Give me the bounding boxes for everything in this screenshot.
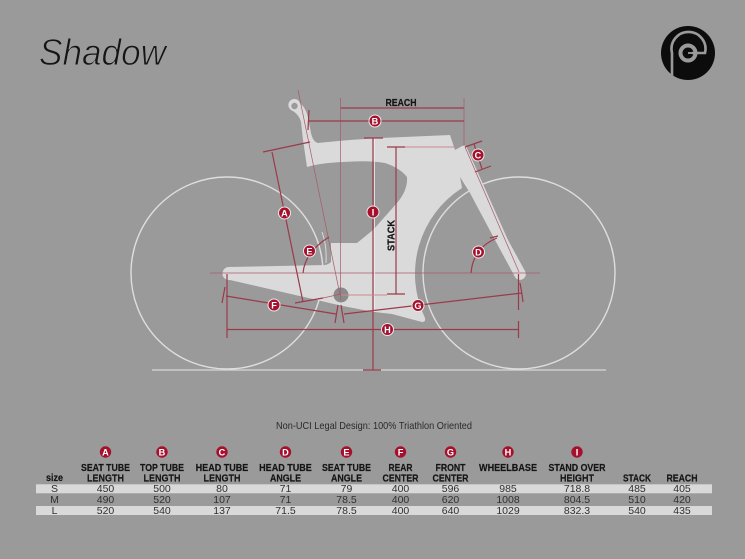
column B: top tube length: TOP TUBE	[140, 462, 184, 474]
column C: head tube length: LENGTH	[204, 472, 240, 484]
column B: top tube length: 540	[153, 505, 171, 517]
column: stack: 510	[628, 494, 646, 506]
column: size: M	[50, 494, 59, 506]
column H: wheelbase: 1029	[496, 505, 520, 517]
column C: head tube length: 137	[213, 505, 231, 517]
column G: front center	[432, 446, 469, 517]
column: stack: STACK	[623, 472, 651, 484]
dimension G: front center	[341, 283, 523, 323]
column E: seat tube angle	[322, 446, 371, 517]
column B: top tube length: 520	[153, 494, 171, 506]
column D: head tube angle: HEAD TUBE	[259, 462, 312, 474]
column C: head tube length: 107	[213, 494, 231, 506]
column E: seat tube angle: 79	[341, 483, 352, 495]
bottom bracket	[334, 288, 348, 302]
ground line	[152, 369, 606, 371]
seat clamp hole	[291, 103, 298, 109]
column: size: S	[51, 483, 58, 495]
column D: head tube angle: D	[282, 447, 289, 457]
column F: rear center: 400	[392, 483, 409, 495]
dimension F: rear center: F	[271, 300, 277, 310]
column B: top tube length: 500	[153, 483, 171, 495]
stack label: STACK	[386, 220, 398, 251]
row band L	[36, 506, 712, 515]
dimension D: head tube angle: D	[475, 247, 482, 257]
dimension B: top tube: B	[372, 116, 379, 126]
column: stack	[623, 472, 651, 517]
thin seat-stay highlight	[322, 232, 326, 263]
column F: rear center	[382, 446, 419, 517]
dimension I: stand over height	[363, 138, 383, 370]
column E: seat tube angle: 78.5	[336, 494, 357, 506]
column H: wheelbase: WHEELBASE	[479, 462, 537, 474]
bike geometry diagram	[131, 90, 615, 370]
dimension H: wheelbase	[227, 274, 518, 338]
column I: stand over height: HEIGHT	[560, 472, 594, 484]
dimension I: stand over height: I	[372, 207, 374, 217]
head tube axis line	[465, 147, 519, 272]
column I: stand over height: STAND OVER	[548, 462, 606, 474]
dimension A: seat tube length: A	[281, 208, 288, 218]
rear wheel	[131, 177, 323, 369]
dimension D: head tube angle	[471, 236, 498, 273]
column G: front center: 596	[442, 483, 459, 495]
column I: stand over height: 832.3	[564, 505, 590, 517]
subtitle note: Non-UCI Legal Design: 100% Triathlon Oriented	[276, 420, 472, 432]
column A: seat tube length	[81, 446, 130, 517]
column: stack: 540	[628, 505, 646, 517]
column I: stand over height: 718.8	[564, 483, 590, 495]
title: Shadow	[39, 32, 168, 73]
column D: head tube angle: ANGLE	[270, 472, 301, 484]
column C: head tube length: C	[219, 447, 226, 457]
dimension A: seat tube length	[263, 142, 341, 303]
column B: top tube length: LENGTH	[144, 472, 180, 484]
bike frame silhouette	[222, 99, 526, 322]
column G: front center: G	[447, 447, 454, 457]
column E: seat tube angle: SEAT TUBE	[322, 462, 371, 474]
column I: stand over height	[548, 446, 606, 517]
dimension C: head tube length	[465, 141, 491, 172]
column B: top tube length: B	[159, 447, 166, 457]
column H: wheelbase	[479, 446, 537, 517]
seat tube axis line	[298, 90, 340, 295]
column G: front center: FRONT	[436, 462, 466, 474]
column: stack: 485	[628, 483, 646, 495]
column F: rear center: 400	[392, 505, 409, 517]
column F: rear center: 400	[392, 494, 409, 506]
column B: top tube length	[140, 446, 184, 517]
dimension B: top tube	[308, 110, 464, 130]
dimension G: front center: G	[414, 301, 422, 311]
icon: brand logo	[661, 26, 715, 80]
column: reach: REACH	[666, 472, 698, 484]
column F: rear center: REAR	[388, 462, 413, 474]
column C: head tube length: HEAD TUBE	[196, 462, 248, 474]
column: reach: 435	[673, 505, 691, 517]
column H: wheelbase: 985	[499, 483, 517, 495]
column: size: size	[46, 472, 63, 484]
column D: head tube angle	[259, 446, 312, 517]
column A: seat tube length: SEAT TUBE	[81, 462, 130, 474]
row band S	[36, 484, 712, 493]
column F: rear center: F	[398, 447, 404, 457]
column A: seat tube length: 490	[97, 494, 114, 506]
column A: seat tube length: 520	[97, 505, 114, 517]
column D: head tube angle: 71.5	[275, 505, 296, 517]
column C: head tube length	[196, 446, 248, 517]
column: reach: 405	[673, 483, 691, 495]
column F: rear center: CENTER	[382, 472, 419, 484]
column A: seat tube length: LENGTH	[87, 472, 124, 484]
column E: seat tube angle: 78.5	[336, 505, 357, 517]
dimension E: seat tube angle	[303, 237, 329, 273]
dimension E: seat tube angle: E	[306, 246, 313, 256]
column C: head tube length: 80	[216, 483, 228, 495]
reach label: REACH	[386, 97, 416, 109]
dimension H: wheelbase: H	[384, 325, 391, 335]
column A: seat tube length: A	[102, 447, 109, 457]
column E: seat tube angle: E	[343, 447, 350, 457]
column: reach	[666, 472, 698, 517]
column: size: L	[52, 505, 58, 517]
column: size	[46, 472, 63, 517]
front wheel	[423, 177, 615, 369]
column I: stand over height: I	[576, 447, 578, 457]
column G: front center: 620	[442, 494, 459, 506]
dimension C: head tube length: C	[475, 150, 482, 160]
column I: stand over height: 804.5	[564, 494, 590, 506]
axle centre line	[210, 272, 540, 274]
column D: head tube angle: 71	[280, 483, 291, 495]
column G: front center: 640	[442, 505, 459, 517]
column H: wheelbase: 1008	[496, 494, 520, 506]
column D: head tube angle: 71	[280, 494, 291, 506]
column: reach: 420	[673, 494, 691, 506]
column G: front center: CENTER	[432, 472, 469, 484]
column E: seat tube angle: ANGLE	[331, 472, 362, 484]
column H: wheelbase: H	[505, 447, 512, 457]
column A: seat tube length: 450	[97, 483, 114, 495]
dimension F: rear center	[222, 287, 338, 323]
geometry table	[36, 446, 712, 517]
